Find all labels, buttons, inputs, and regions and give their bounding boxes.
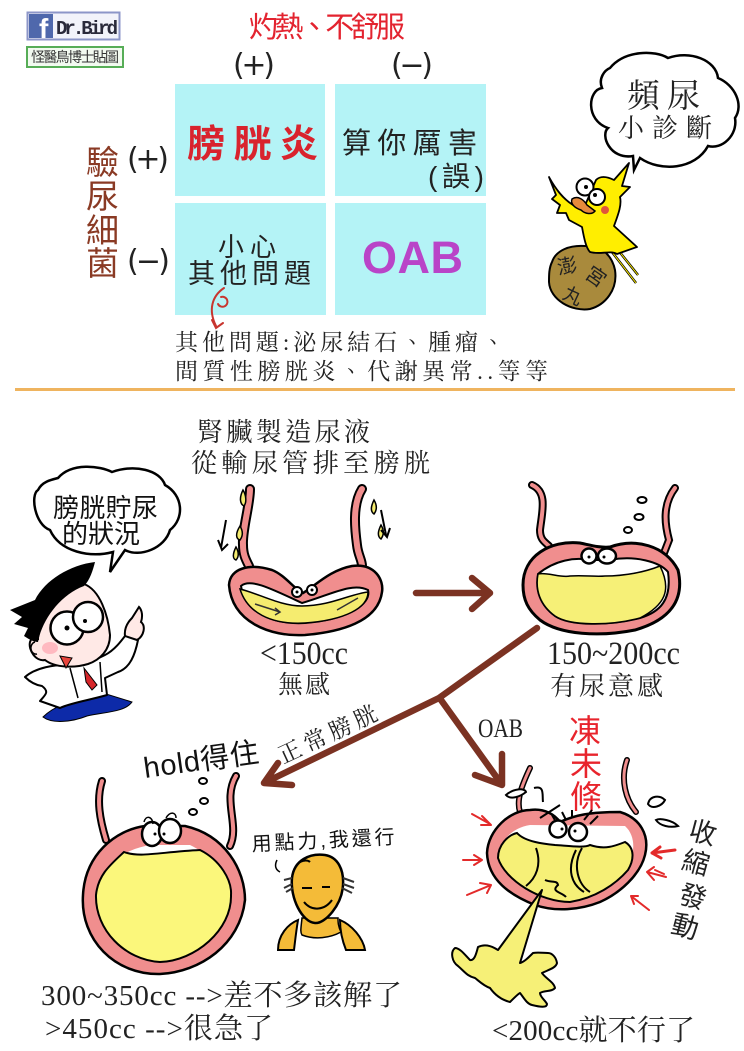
panel: bottom-right cell OAB bbox=[335, 203, 486, 315]
speech bubble: bladder storage: 膀胱貯尿 bbox=[53, 493, 158, 523]
icon: old man bbox=[251, 826, 395, 951]
text: other problems list bbox=[175, 330, 548, 384]
text: other problems list: 間質性膀胱炎、代謝異常..等等 bbox=[175, 359, 548, 384]
panel: top-right cell: 算你厲害 bbox=[342, 127, 477, 160]
label: about to burst bbox=[569, 713, 602, 815]
row label minus: (−) bbox=[127, 244, 170, 279]
column label plus: (+) bbox=[233, 48, 275, 83]
panel: top-right cell: (誤) bbox=[428, 161, 484, 192]
column label minus: (−) bbox=[391, 48, 433, 83]
label: about to burst: 凍 bbox=[569, 713, 601, 749]
text: kidney makes urine: 腎臟製造尿液 bbox=[197, 418, 370, 447]
vertical label: urine bacteria bbox=[86, 144, 119, 282]
speech bubble: frequent urination mini diagnosis bbox=[591, 53, 739, 170]
text: under 150cc no feeling bbox=[260, 636, 348, 699]
vertical label: urine bacteria: 驗 bbox=[86, 144, 119, 181]
label: hold it: hold得住 bbox=[141, 736, 261, 785]
illustration: nearly empty bladder bbox=[218, 489, 390, 635]
logo: Dr.Bird: Dr.Bird bbox=[56, 18, 118, 40]
label: about to burst: 未 bbox=[570, 746, 602, 782]
panel: top-left cell cystitis: 膀胱炎 bbox=[187, 124, 318, 166]
text: under 150cc no feeling: 無感 bbox=[278, 671, 330, 699]
panel: bottom-right cell OAB: OAB bbox=[362, 232, 463, 283]
text: 300 to 450cc: >450cc -->很急了 bbox=[45, 1012, 273, 1045]
speech bubble: bladder storage: 的狀況 bbox=[62, 519, 140, 549]
text: kidney makes urine: 從輸尿管排至膀胱 bbox=[191, 449, 430, 478]
text: other problems list: 其他問題:泌尿結石、腫瘤、 bbox=[175, 330, 505, 355]
text: 150 to 200cc urge: 有尿意感 bbox=[550, 672, 663, 701]
label: OAB branch: OAB bbox=[478, 714, 523, 743]
panel: top-right cell bbox=[335, 84, 486, 196]
arrow: branch to normal bladder bbox=[264, 628, 537, 785]
speech bubble: frequent urination mini diagnosis: 小診斷 bbox=[618, 114, 712, 143]
vertical label: urine bacteria: 細 bbox=[86, 212, 119, 249]
illustration: OAB bladder bbox=[452, 760, 678, 1007]
logo: Dr.Bird: f bbox=[39, 13, 49, 44]
vertical label: urine bacteria: 菌 bbox=[86, 245, 119, 282]
label: contraction vertical text: 收 bbox=[686, 815, 720, 851]
text: under 150cc no feeling: <150cc bbox=[260, 636, 348, 672]
text: 150 to 200cc urge bbox=[547, 636, 680, 701]
text: 150 to 200cc urge: 150~200cc bbox=[547, 636, 680, 672]
panel: bottom-left cell: 小心 bbox=[218, 232, 276, 262]
text: under 200cc cannot hold: <200cc就不行了 bbox=[492, 1014, 695, 1047]
label: normal bladder: 正常膀胱 bbox=[275, 701, 381, 769]
speech bubble: bladder storage bbox=[34, 467, 180, 572]
logo: Dr.Bird: 怪醫鳥博士貼圖 bbox=[31, 49, 119, 65]
label: contraction vertical text: 發 bbox=[676, 879, 710, 915]
vertical label: urine bacteria: 尿 bbox=[86, 178, 119, 215]
panel: bottom-left cell bbox=[175, 203, 326, 315]
text: kidney makes urine bbox=[191, 418, 430, 478]
heading: burning discomfort: 灼熱、不舒服 bbox=[249, 11, 405, 44]
label: contraction vertical text bbox=[668, 815, 720, 945]
logo: Dr.Bird bbox=[27, 12, 123, 67]
text: 300 to 450cc bbox=[41, 979, 402, 1045]
arrow: red squiggle to other problems bbox=[212, 288, 227, 328]
arrow: branch to OAB bladder bbox=[441, 700, 502, 785]
panel: bottom-left cell: 其他問題 bbox=[188, 259, 311, 289]
illustration: full bladder bbox=[83, 776, 245, 974]
panel: top-left cell cystitis bbox=[175, 84, 325, 196]
icon: yellow bird on pill bbox=[549, 163, 638, 311]
arrows: contraction bbox=[463, 814, 675, 910]
icon: yellow bird on pill: 丸 bbox=[559, 283, 586, 311]
arrow: to filled bladder bbox=[416, 578, 490, 609]
icon: yellow bird on pill: 宮 bbox=[581, 262, 610, 292]
illustration: half full bladder bbox=[523, 485, 680, 634]
speech bubble: frequent urination mini diagnosis: 頻尿 bbox=[627, 79, 700, 115]
label: about to burst: 條 bbox=[570, 779, 602, 815]
row label plus: (+) bbox=[127, 142, 169, 177]
icon: yellow bird on pill: 澎 bbox=[555, 253, 579, 280]
label: contraction vertical text: 動 bbox=[668, 909, 702, 945]
text: 300 to 450cc: 300~350cc -->差不多該解了 bbox=[41, 979, 402, 1012]
icon: old man: 用點力,我還行 bbox=[251, 826, 395, 856]
icon: doctor character bbox=[10, 562, 144, 721]
label: contraction vertical text: 縮 bbox=[679, 845, 713, 881]
